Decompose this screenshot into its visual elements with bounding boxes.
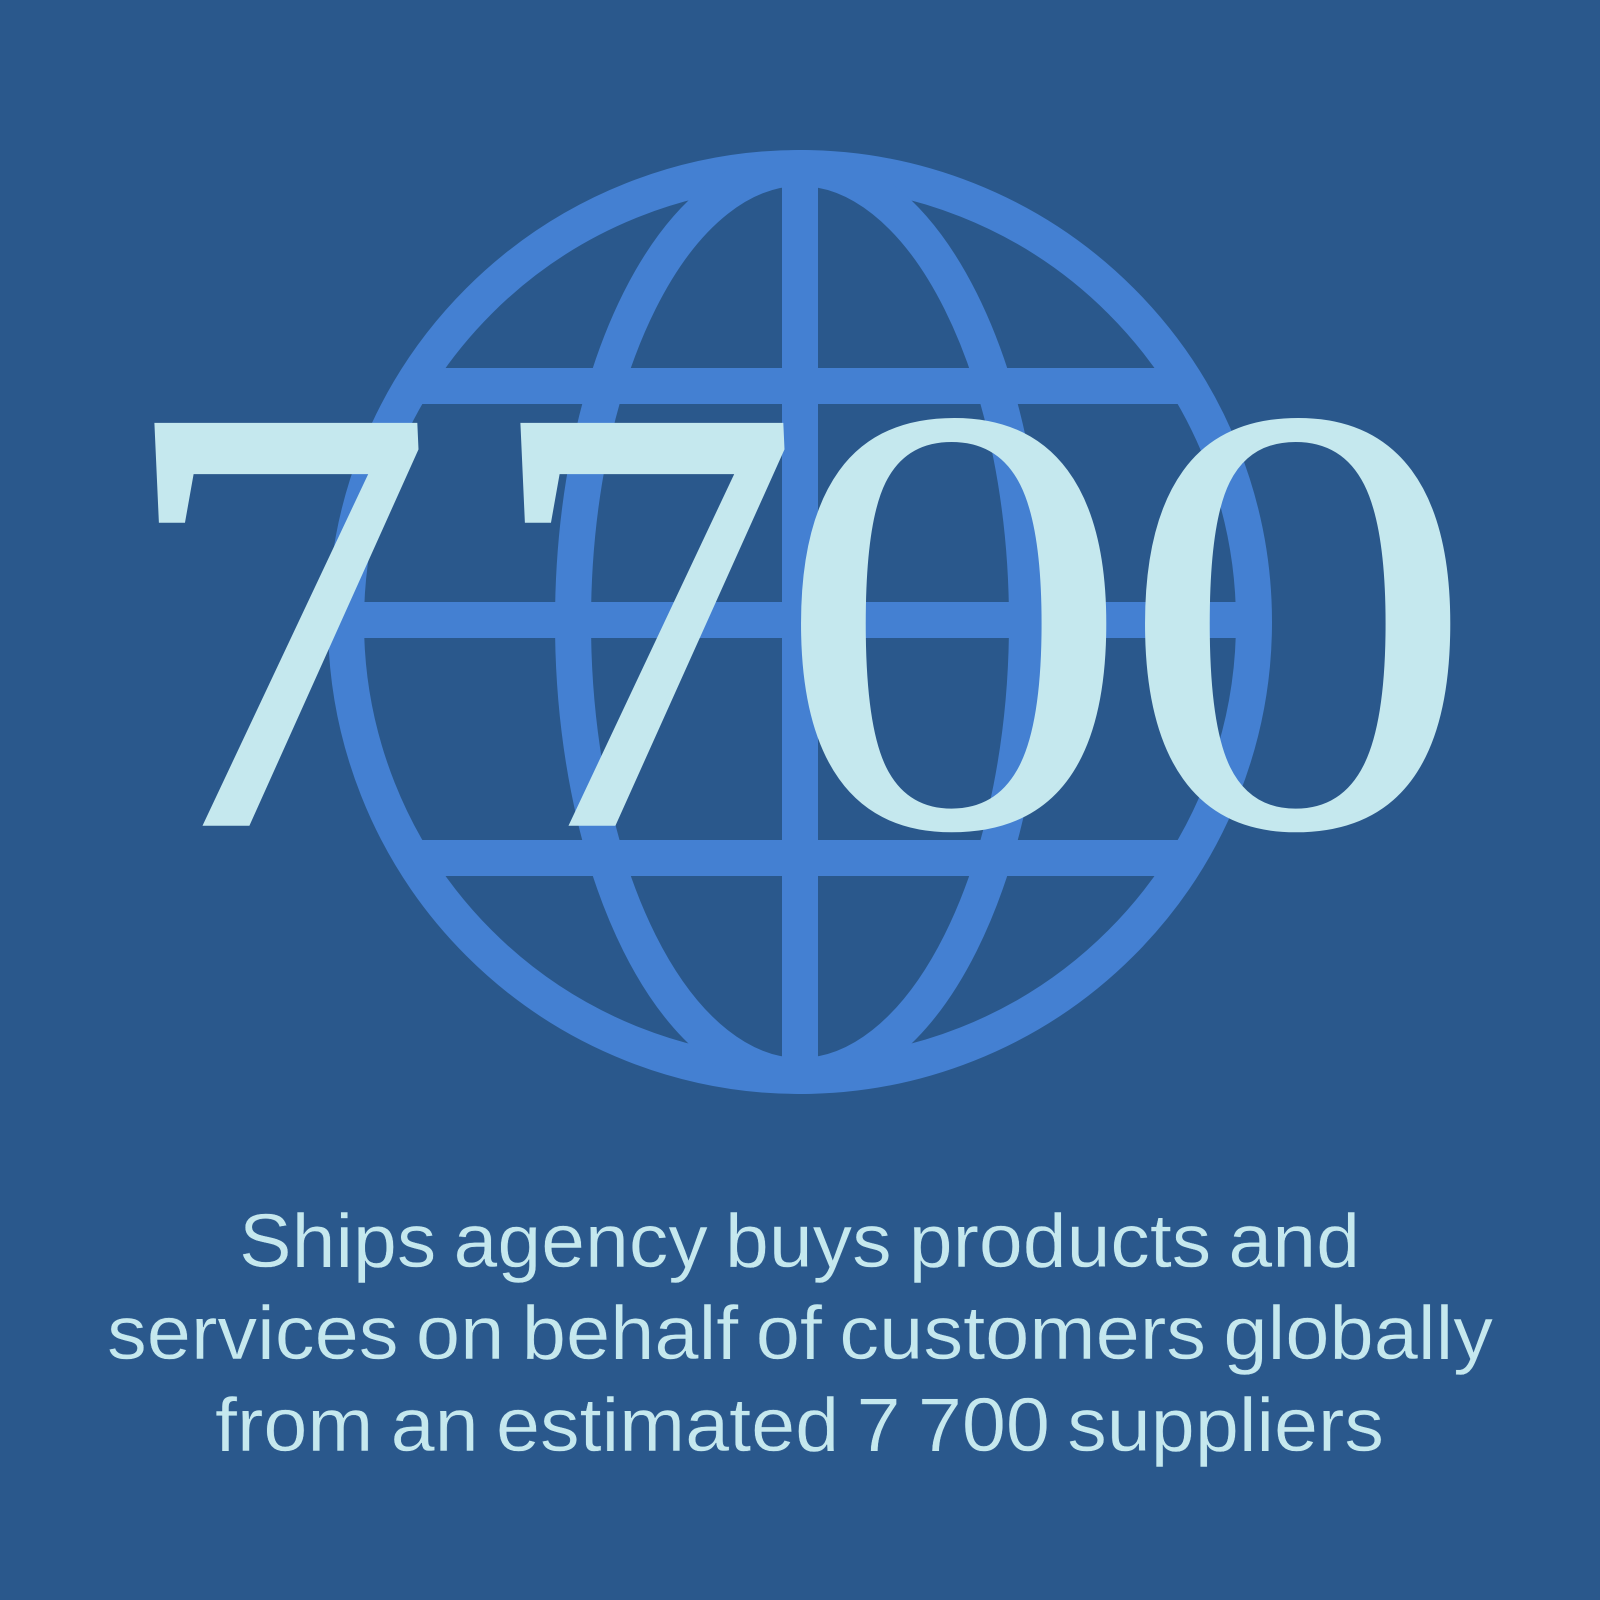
caption text: from an estimated 7 700 suppliers [215, 1383, 1384, 1468]
caption text [107, 1199, 1493, 1468]
big number: 7 700: 0 [774, 279, 1134, 959]
big number: 7 700 [109, 279, 1478, 959]
icon: globe [346, 168, 1254, 1076]
big number: 7 700: 0 [1118, 279, 1478, 959]
caption text: services on behalf of customers globally [107, 1291, 1493, 1376]
caption text: Ships agency buys products and [239, 1199, 1360, 1284]
big number: 7 700: 7 [109, 283, 456, 955]
big number: 7 700: 7 [475, 283, 822, 955]
